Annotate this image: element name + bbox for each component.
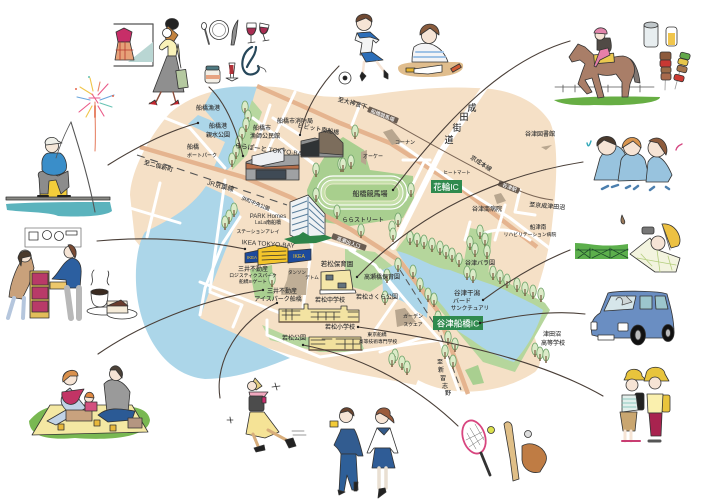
illustration: fashion mirror bbox=[114, 24, 153, 66]
building: tower bbox=[284, 195, 333, 244]
map labels: 至新習志野 bbox=[437, 359, 451, 397]
map labels: 若松小学校 bbox=[325, 323, 355, 331]
map labels: 東京船橋 bbox=[367, 331, 387, 338]
building: IKEA bbox=[245, 245, 311, 265]
road badges bbox=[331, 106, 520, 251]
railways bbox=[137, 100, 553, 390]
illustration: medicine and stethoscope bbox=[205, 47, 266, 83]
illustration: furniture shoppers bbox=[8, 245, 81, 318]
map labels: 船橋市 bbox=[253, 124, 271, 132]
map labels: コーナン bbox=[395, 140, 415, 146]
illustration: wall clocks bbox=[25, 228, 81, 247]
illustration: students bbox=[330, 408, 398, 498]
map labels: バード bbox=[453, 298, 471, 305]
leader dots bbox=[197, 122, 484, 346]
map labels: LaLa南船橋 bbox=[255, 219, 281, 226]
map labels: ボートパーク bbox=[187, 152, 217, 159]
expressways bbox=[140, 86, 537, 394]
illustration: picnic family bbox=[29, 366, 150, 439]
illustration: studying boy bbox=[398, 24, 463, 77]
illustration: jockey and horse bbox=[554, 28, 660, 105]
river and bay bbox=[136, 186, 290, 379]
map labels: 至京成津田沼 bbox=[529, 200, 565, 212]
illustration: fireworks bbox=[75, 76, 114, 151]
map labels: 船橋競馬場 bbox=[352, 189, 388, 198]
map labels: 高等学校 bbox=[541, 339, 565, 347]
map labels: 谷津干潟 bbox=[454, 288, 480, 297]
white roads bbox=[130, 84, 552, 395]
map labels: リハビリテーション病院 bbox=[504, 231, 557, 238]
map labels: デトム bbox=[305, 274, 319, 281]
illustration: fisherman bbox=[6, 122, 112, 216]
building: LaLaport bbox=[246, 148, 299, 180]
building: junior high school bbox=[279, 304, 359, 322]
illustration: car bbox=[591, 291, 674, 345]
map labels: サンクチュアリ bbox=[451, 304, 489, 312]
illustration: sports gear bbox=[458, 417, 546, 481]
map labels: 親水公園 bbox=[206, 131, 230, 139]
IC signs: 谷津船橋IC bbox=[437, 318, 479, 328]
map labels: PARK Homes bbox=[250, 214, 286, 220]
map bbox=[130, 84, 565, 397]
map labels: ビビット南船橋 bbox=[297, 121, 340, 137]
map labels: 若松保育園 bbox=[321, 259, 353, 268]
map labels: 船橋漁港 bbox=[196, 104, 220, 112]
map labels: 漁師公民館 bbox=[250, 132, 280, 140]
building: IKEA: IKEA bbox=[293, 254, 305, 260]
map labels: アイスパーク船橋 bbox=[254, 295, 302, 303]
map labels: 谷津図書館 bbox=[525, 130, 555, 138]
map labels: 高等技術専門学校 bbox=[359, 338, 397, 345]
map labels: 高瀬出入口 bbox=[336, 235, 361, 250]
map labels: 船橋競馬場 bbox=[370, 108, 395, 124]
map labels bbox=[143, 95, 565, 397]
illustration: nursery children bbox=[587, 136, 682, 190]
illustration: drinks and skewers bbox=[644, 22, 691, 90]
map labels: 京成本線 bbox=[469, 153, 493, 173]
building: nursery bbox=[320, 270, 356, 294]
map labels: 津田沼 bbox=[543, 330, 561, 338]
map labels: ロジスティクスパーク bbox=[229, 272, 277, 279]
map labels: 船橋港 bbox=[209, 122, 227, 130]
building: elementary school bbox=[309, 337, 362, 350]
map labels: 至二俣新町 bbox=[143, 158, 174, 174]
map labels: ガーデン bbox=[403, 313, 423, 320]
racecourse bbox=[317, 176, 407, 209]
leader lines bbox=[97, 41, 603, 426]
map labels: オーケー bbox=[363, 153, 383, 160]
map labels: 三井不動産 bbox=[238, 265, 268, 273]
map labels: 浜町中央公園 bbox=[240, 195, 271, 212]
map labels: タンソン bbox=[288, 269, 306, 276]
map land bbox=[130, 86, 556, 392]
IC signs bbox=[431, 180, 483, 330]
tidal flat water bbox=[397, 251, 543, 362]
trees bbox=[222, 101, 549, 375]
map labels: JR京葉線 bbox=[206, 178, 236, 194]
illustration: coffee and cake bbox=[87, 270, 137, 319]
illustration: skater bbox=[227, 378, 306, 452]
map labels: 若松公園 bbox=[282, 334, 306, 342]
map labels: ステーションアレイ bbox=[236, 229, 280, 235]
map labels: 船橋IIIゲート bbox=[239, 278, 267, 285]
illustration: schoolchildren bbox=[620, 367, 670, 441]
map labels: 至大神宮下 bbox=[337, 95, 368, 111]
map labels: 若松さくら公園 bbox=[356, 293, 398, 301]
illustration: cutlery and wine bbox=[202, 20, 269, 45]
map labels: ヒートマート bbox=[444, 170, 470, 176]
building: Vivit bbox=[301, 130, 343, 157]
map labels: 船津南 bbox=[530, 223, 547, 231]
map labels: 三井不動産 bbox=[267, 287, 297, 295]
map labels: 高瀬橋保育園 bbox=[364, 273, 400, 281]
illustration: shopper woman bbox=[149, 18, 188, 105]
map labels: 若松中学校 bbox=[315, 296, 345, 304]
map labels: ららぽーと TOKYO-BAY bbox=[234, 142, 307, 158]
IC signs: 花輪IC bbox=[433, 182, 459, 192]
map labels: 船橋市消防局 bbox=[277, 117, 313, 125]
building: IKEA: IKEA bbox=[247, 255, 257, 260]
map labels: 船橋 bbox=[187, 143, 199, 151]
parking lots bbox=[281, 129, 552, 327]
map labels: 谷津バラ園 bbox=[465, 259, 495, 267]
green parks bbox=[232, 100, 550, 385]
map labels: 谷津駅 bbox=[501, 182, 518, 194]
map labels: 成田街道 bbox=[444, 102, 477, 145]
illustration: soccer boy bbox=[339, 14, 388, 84]
map labels: 谷津南病院 bbox=[472, 205, 502, 213]
map labels: スクエア bbox=[403, 321, 423, 328]
map labels: ららストリート bbox=[342, 217, 384, 224]
illustration: birdwatcher bbox=[575, 215, 680, 272]
map labels: IKEA TOKYO-BAY bbox=[241, 239, 296, 250]
